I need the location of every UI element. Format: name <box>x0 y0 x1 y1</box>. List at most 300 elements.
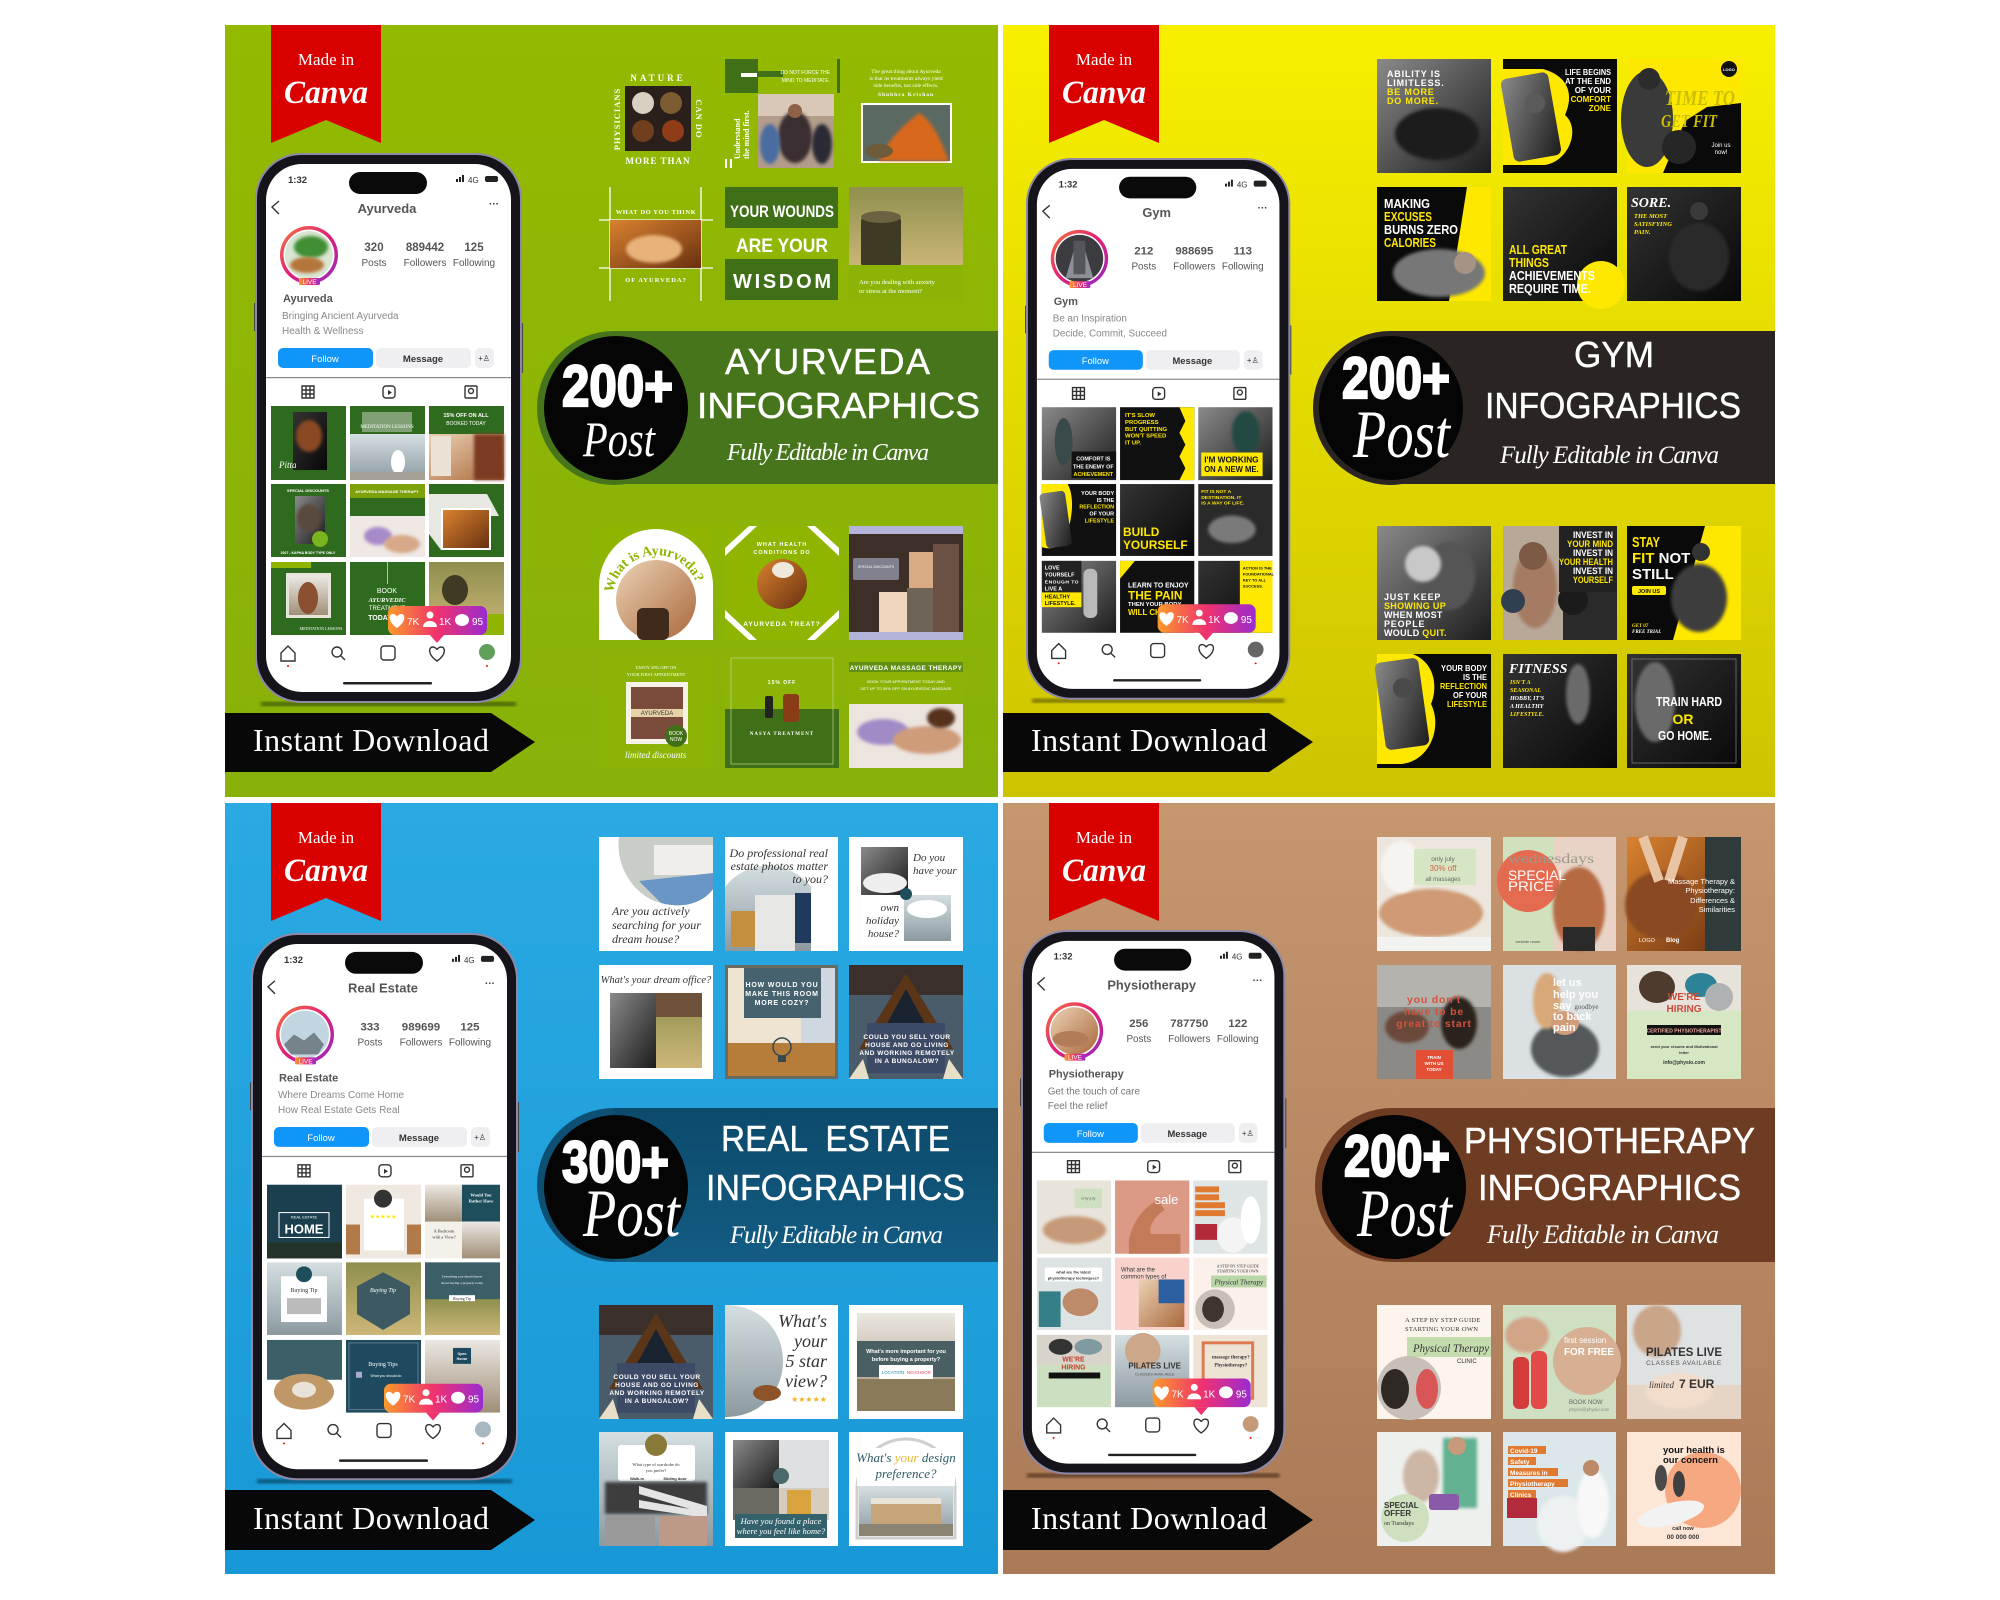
phone mockup: Real Estate profile: +♙ <box>474 1133 486 1142</box>
tile grid bottom: Physiotherapy: 00 000 000 <box>1667 1534 1700 1541</box>
thumbnail grid: sale <box>1155 1192 1178 1207</box>
tile grid top: Physiotherapy: info@physio.com <box>1663 1060 1705 1066</box>
tile grid top: Real Estate: MAKE THIS ROOM <box>745 991 819 998</box>
thumbnail grid: YOURSELF <box>1123 538 1188 552</box>
arrow: Instant Download <box>1003 1490 1313 1550</box>
banner: 200+ Post Ayurveda Infographics: Post <box>582 411 656 467</box>
tile grid top: Ayurveda: Understand <box>733 118 742 159</box>
tile grid bottom: Ayurveda: BOOK <box>669 731 684 737</box>
tile grid top: Ayurveda: The great thing about Ayurveda <box>871 69 941 75</box>
tile grid top: Ayurveda: Shubhra Krishan <box>878 92 934 98</box>
tile grid bottom: Physiotherapy: Safety <box>1510 1459 1530 1466</box>
phone mockup: Gym profile: 1:32 <box>1059 180 1077 190</box>
tile grid bottom: Physiotherapy: 7 EUR <box>1679 1377 1715 1391</box>
panel: Physiotherapy <box>1003 803 1775 1574</box>
thumbnail grid: Buying Tips <box>368 1362 398 1368</box>
ribbon: Made in Canva: Canva <box>1062 75 1146 111</box>
tile grid bottom: Ayurveda: GET UP TO 50% OFF ON AYURVEDIC MASSAGE <box>860 686 952 691</box>
tile grid top: Gym: GET FIT <box>1661 111 1718 131</box>
tile grid top: Physiotherapy: HIRING <box>1666 1004 1702 1015</box>
tile grid bottom: Physiotherapy: PILATES LIVE <box>1646 1345 1722 1359</box>
tile grid bottom: Real Estate: What's more important for you <box>866 1349 946 1355</box>
arrow: Instant Download: Instant Download <box>1031 722 1267 758</box>
thumbnail grid: SPECIAL DISCOUNTS <box>287 488 329 493</box>
thumbnail grid: Would You <box>470 1193 492 1198</box>
phone mockup: Ayurveda profile: Ayurveda <box>358 201 417 216</box>
tile grid top: Physiotherapy: Massage Therapy & <box>1668 877 1735 886</box>
tile grid bottom: Physiotherapy: call now <box>1672 1526 1695 1532</box>
banner: 200+ Post Physiotherapy Infographics: PHYSIOTHERAPY <box>1464 1120 1755 1161</box>
tile grid top: Ayurveda: OF AYURVEDA? <box>625 277 687 284</box>
phone mockup: Gym profile <box>1025 158 1291 703</box>
tile grid top: Physiotherapy: help you <box>1553 989 1598 1001</box>
tile grid bottom: Real Estate: What's <box>778 1311 827 1331</box>
phone mockup: Ayurveda profile <box>254 153 523 706</box>
tile grid top: Physiotherapy: CERTIFIED PHYSIOTHERAPIST <box>1646 1028 1722 1034</box>
thumbnail grid: ON A NEW ME. <box>1204 465 1259 474</box>
tile grid bottom: Real Estate: COULD YOU SELL YOUR <box>613 1374 701 1381</box>
phone mockup: Physiotherapy profile: Physiotherapy <box>1049 1069 1124 1081</box>
tile grid top: Physiotherapy: have to be <box>1404 1006 1464 1018</box>
tile grid bottom: Gym: GO HOME. <box>1658 728 1712 743</box>
thumbnail grid: 15% OFF ON ALL <box>443 413 489 419</box>
tile grid bottom: Physiotherapy: on Tuesdays <box>1384 1521 1415 1527</box>
tile grid top: Real Estate: house? <box>868 928 899 940</box>
phone mockup: Ayurveda profile: ··· <box>489 199 499 210</box>
phone mockup: Gym profile: Gym <box>1142 205 1171 220</box>
banner: 200+ Post Ayurveda Infographics <box>537 331 998 485</box>
engagement badge: 1K <box>1208 615 1221 626</box>
tile grid bottom: Physiotherapy: CLINIC <box>1457 1359 1477 1365</box>
tile grid top: Real Estate <box>599 837 963 1079</box>
thumbnail grid: LEARN TO ENJOY <box>1128 582 1189 589</box>
bottom navigation <box>1047 1416 1259 1456</box>
tile grid bottom: Gym: GET 07 <box>1632 624 1649 629</box>
phone mockup: Physiotherapy profile <box>1020 930 1286 1477</box>
engagement badge: 7K <box>403 1395 416 1406</box>
phone mockup: Ayurveda profile: 1:32 <box>288 175 307 186</box>
thumbnail grid: House <box>457 1357 467 1361</box>
tile grid bottom: Real Estate: your <box>792 1331 828 1351</box>
tile grid top: Gym: LIFE BEGINS <box>1565 68 1612 77</box>
tile grid bottom: Ayurveda: AYURVEDA MASSAGE THERAPY <box>850 665 963 672</box>
phone mockup: Real Estate profile: 333 <box>360 1022 380 1034</box>
ribbon: Made in Canva: Made in <box>298 50 355 69</box>
thumbnail grid: HIRING <box>1061 1365 1086 1372</box>
phone mockup: Ayurveda profile: Message <box>403 354 443 365</box>
thumbnail grid: Physiotherapy? <box>1214 1364 1248 1369</box>
banner: 300+ Post Real Estate Infographics: INFOGRAPHICS <box>706 1167 965 1208</box>
phone mockup: Gym profile: Follow <box>1082 356 1109 366</box>
bottom navigation <box>1052 642 1264 682</box>
tile grid top: Ayurveda: or stress at the moment? <box>859 288 922 295</box>
tile grid bottom: Gym: LIFESTYLE <box>1447 699 1487 709</box>
phone mockup: Real Estate profile: Following <box>449 1037 491 1048</box>
banner: 300+ Post Real Estate Infographics: REAL ESTATE <box>721 1118 950 1159</box>
phone mockup: Real Estate profile: Posts <box>358 1037 383 1048</box>
tile grid top: Real Estate: MORE COZY? <box>755 1000 809 1007</box>
engagement badge <box>1153 1378 1251 1415</box>
banner: 300+ Post Real Estate Infographics: 300+ <box>562 1130 669 1195</box>
phone mockup: Gym profile: Gym <box>1054 296 1078 308</box>
tile grid top: Physiotherapy: only july <box>1431 856 1455 863</box>
thumbnail grid: PROGRESS <box>1125 420 1159 426</box>
phone mockup: Physiotherapy profile: Following <box>1217 1034 1259 1045</box>
thumbnail grid: with a View? <box>432 1234 456 1239</box>
engagement badge: 95 <box>1236 1389 1247 1400</box>
engagement badge: 7K <box>1171 1389 1184 1400</box>
tile grid bottom: Physiotherapy: limited <box>1649 1380 1674 1390</box>
phone mockup: Gym profile: Message <box>1172 356 1212 366</box>
tile grid bottom: Real Estate: Have you found a place <box>740 1516 822 1526</box>
thumbnail grid: physiotherapy techniques? <box>1048 1275 1100 1280</box>
tile grid bottom: Real Estate: ★★★★★ <box>791 1395 827 1404</box>
banner: 300+ Post Real Estate Infographics: Fully Editable in Canva <box>729 1222 943 1249</box>
tile grid bottom: Ayurveda: ENJOY 20% OFF ON <box>636 665 677 670</box>
tile grid top: Real Estate: Are you actively <box>611 904 690 918</box>
thumbnail grid: HEALTHY <box>1045 594 1070 600</box>
engagement badge: 1K <box>435 1395 448 1406</box>
thumbnail grid: What are the <box>1121 1268 1156 1274</box>
thumbnail grid: only july <box>1081 1195 1095 1200</box>
tile grid bottom: Ayurveda: limited discounts <box>625 750 687 760</box>
thumbnail grid: Physical Therapy <box>1213 1279 1264 1286</box>
phone mockup: Real Estate profile: 989699 <box>402 1022 440 1034</box>
phone mockup: Gym profile: Decide, Commit, Succeed <box>1053 328 1167 339</box>
ribbon: Made in Canva: Canva <box>284 853 368 889</box>
tile grid bottom: Ayurveda: What is Ayurveda? <box>604 546 704 590</box>
tile grid bottom: Real Estate: AND WORKING REMOTELY <box>609 1390 705 1397</box>
engagement badge <box>1158 604 1256 641</box>
engagement badge: 95 <box>1241 615 1252 626</box>
thumbnail grid: what are the latest <box>1055 1270 1091 1275</box>
thumbnail grid: Buying Tip <box>290 1288 318 1294</box>
tile grid bottom: Gym: LIFESTYLE. <box>1509 712 1544 718</box>
tile grid bottom: Gym <box>1374 526 1741 768</box>
engagement badge <box>388 606 487 643</box>
tile grid top: Gym: SORE. <box>1631 196 1671 211</box>
tile grid bottom: Real Estate: What's your design <box>856 1450 956 1465</box>
tile grid top: Gym: COMFORT <box>1571 95 1611 104</box>
thumbnail grid: ★★★★★ <box>370 1214 396 1221</box>
tile grid top: Gym: LIMITLESS. <box>1387 78 1444 88</box>
banner: 200+ Post Physiotherapy Infographics: Post <box>1356 1175 1454 1251</box>
tile grid top: Physiotherapy: Similarities <box>1699 905 1735 914</box>
phone mockup: Ayurveda profile: Posts <box>361 258 387 269</box>
phone mockup: Ayurveda profile: Bringing Ancient Ayurveda <box>282 311 399 322</box>
tile grid top: Gym <box>1377 59 1741 309</box>
tile grid bottom: Gym: FITNESS <box>1508 662 1568 677</box>
tile grid top: Ayurveda: ARE YOUR <box>736 236 828 257</box>
phone mockup: Physiotherapy profile: Get the touch of care <box>1048 1086 1140 1097</box>
ribbon: Made in Canva <box>271 803 381 921</box>
tile grid bottom: Physiotherapy: FOR FREE <box>1564 1346 1614 1358</box>
phone mockup: Gym profile: Posts <box>1131 261 1156 272</box>
phone mockup: Real Estate profile <box>250 933 519 1483</box>
tile grid bottom: Gym: JOIN US <box>1638 589 1660 595</box>
tile grid top: Ayurveda: PHYSICIANS <box>612 88 622 150</box>
phone mockup: Ayurveda profile: Followers <box>404 258 446 269</box>
thumbnail grid: AYURVEDA MASSAGE THERAPY <box>355 489 419 494</box>
tile grid top: Gym: ABILITY IS <box>1387 69 1441 79</box>
phone mockup: Ayurveda profile: +♙ <box>478 354 490 363</box>
thumbnail grid <box>1039 407 1275 633</box>
banner: 200+ Post Gym Infographics: GYM <box>1574 334 1654 375</box>
phone mockup: Real Estate profile: 4G <box>464 956 475 965</box>
arrow: Instant Download: Instant Download <box>253 722 489 758</box>
tile grid bottom: Real Estate: you prefer? <box>646 1468 666 1473</box>
thumbnail grid: about buying a property today <box>441 1281 483 1285</box>
tile grid top: Ayurveda: NATURE <box>630 73 686 83</box>
thumbnail grid: ENOUGH TO <box>1045 580 1079 586</box>
tile grid top: Real Estate: What's your dream office? <box>601 975 712 986</box>
phone mockup: Ayurveda profile: Health & Wellness <box>282 326 364 337</box>
tile grid top: Gym: ACHIEVEMENTS <box>1509 268 1595 283</box>
tile grid top: Real Estate: HOUSE AND GO LIVING <box>865 1042 949 1049</box>
ribbon: Made in Canva: Canva <box>284 75 368 111</box>
banner: 200+ Post Gym Infographics: 200+ <box>1342 346 1450 411</box>
tile grid top: Ayurveda: YOUR WOUNDS <box>730 202 834 221</box>
tile grid top: Physiotherapy: website name <box>1516 939 1541 944</box>
phone mockup: Gym profile: Following <box>1222 261 1264 272</box>
phone mockup: Real Estate profile: Where Dreams Come Home <box>278 1090 405 1101</box>
thumbnail grid: KEY TO ALL <box>1243 578 1267 583</box>
tile grid top: Gym: BURNS ZERO <box>1384 222 1458 237</box>
thumbnail grid: Open <box>458 1352 466 1356</box>
tile grid top: Ayurveda: WISDOM <box>733 271 831 293</box>
ribbon: Made in Canva: Canva <box>1062 853 1146 889</box>
tile grid top: Physiotherapy: you don't <box>1407 994 1461 1006</box>
tile grid bottom: Gym: SHOWING UP <box>1384 601 1446 611</box>
tile grid bottom: Ayurveda: BOOK YOUR APPOINTMENT TODAY AND <box>867 679 945 684</box>
tile grid bottom: Gym: WHEN MOST <box>1384 610 1443 620</box>
tile grid top: Ayurveda <box>599 59 963 301</box>
tile grid top: Physiotherapy <box>1377 837 1741 1079</box>
tile grid top: Gym: DO MORE. <box>1387 96 1439 106</box>
phone mockup: Real Estate profile: 1:32 <box>284 955 303 966</box>
tile grid top: Physiotherapy: say goodbye <box>1553 1000 1599 1012</box>
tile grid top: Ayurveda: is that its treatments always yield <box>869 76 943 82</box>
phone mockup: Ayurveda profile: Following <box>453 258 495 269</box>
thumbnail grid: CLASSES AVAILABLE <box>1135 1372 1175 1377</box>
tile grid top: Physiotherapy: PRICE <box>1508 878 1554 894</box>
phone mockup: Physiotherapy profile: Follow <box>1077 1128 1104 1139</box>
phone mockup: Physiotherapy profile: 122 <box>1228 1018 1247 1030</box>
tile grid top: Physiotherapy: all massages <box>1425 877 1461 883</box>
phone mockup: Gym profile: LIVE <box>1073 282 1087 289</box>
phone mockup: Real Estate profile: Message <box>399 1133 439 1144</box>
banner: 200+ Post Physiotherapy Infographics: Fully Editable in Canva <box>1486 1220 1719 1249</box>
thumbnail grid: LIFESTYLE. <box>1045 601 1076 607</box>
tile grid top: Gym: ALL GREAT <box>1509 242 1567 257</box>
arrow: Instant Download: Instant Download <box>1031 1500 1267 1536</box>
tile grid bottom: Real Estate: where you feel like home? <box>737 1526 826 1536</box>
thumbnail grid: Buying Tip <box>453 1296 471 1301</box>
phone mockup: Physiotherapy profile: LIVE <box>1068 1055 1082 1062</box>
thumbnail grid: LIFESTYLE <box>1085 518 1114 524</box>
tile grid top: Physiotherapy: Blog <box>1666 938 1680 944</box>
banner: 300+ Post Real Estate Infographics: Post <box>582 1175 682 1251</box>
tile grid bottom: Physiotherapy: CLASSES AVAILABLE <box>1646 1360 1722 1367</box>
thumbnail grid: PILATES LIVE <box>1128 1362 1181 1371</box>
tile grid bottom: Gym: FIT NOT <box>1632 550 1690 567</box>
thumbnail grid: BUT QUITTING <box>1125 427 1168 433</box>
tile grid bottom: Gym: SEASONAL <box>1510 688 1541 694</box>
tile grid top: Gym: TIME TO <box>1665 86 1735 110</box>
banner: 200+ Post Physiotherapy Infographics: 200+ <box>1344 1124 1450 1189</box>
tile grid top: Gym: PAIN. <box>1634 229 1651 236</box>
panel: Ayurveda <box>225 25 998 797</box>
phone mockup: Physiotherapy profile: ··· <box>1253 975 1263 986</box>
phone mockup: Real Estate profile: 125 <box>460 1022 480 1034</box>
thumbnail grid: WE'RE <box>1062 1357 1085 1364</box>
tile grid bottom: Physiotherapy: Clinics <box>1510 1492 1532 1499</box>
banner: 200+ Post Gym Infographics: Fully Editable in Canva <box>1499 442 1719 469</box>
tile grid bottom: Gym: ISN'T A <box>1509 680 1531 686</box>
thumbnail grid: FOUNDATIONAL <box>1243 572 1275 577</box>
tile grid top: Gym: ZONE <box>1589 104 1612 113</box>
tile grid top: Ayurveda: CAN DO <box>694 99 704 139</box>
tile grid top: Physiotherapy: Physiotherapy: <box>1685 886 1735 895</box>
tile grid top: Gym: SATISFYING <box>1634 221 1672 228</box>
tile grid bottom: Real Estate: What type of wardrobe do <box>632 1462 680 1467</box>
tile grid bottom: Real Estate: before buying a property? <box>872 1357 941 1363</box>
tile grid top: Ayurveda: the mind first. <box>742 110 751 159</box>
thumbnail grid: Pitta <box>278 460 297 470</box>
thumbnail grid: BOOK <box>377 588 397 595</box>
tile grid bottom: Real Estate: 5 star <box>785 1351 828 1371</box>
phone mockup: Gym profile: Be an Inspiration <box>1053 314 1127 325</box>
thumbnail grid: REFLECTION <box>1079 505 1114 511</box>
tile grid bottom: Gym: REFLECTION <box>1440 681 1487 691</box>
thumbnail grid: What you should do <box>371 1374 401 1378</box>
thumbnail grid: AYURVEDIC <box>367 597 406 604</box>
tile grid bottom: Physiotherapy: Measures in <box>1510 1470 1548 1477</box>
tile grid top: Ayurveda: side benefits, not side effects. <box>874 82 939 89</box>
tile grid top: Physiotherapy: LOGO <box>1639 938 1656 944</box>
thumbnail grid: FIT IS NOT A <box>1201 489 1232 495</box>
tile grid top: Real Estate: HOW WOULD YOU <box>746 982 818 989</box>
thumbnail grid <box>271 406 504 635</box>
tile grid bottom: Ayurveda: SPECIAL DISCOUNTS <box>858 565 895 569</box>
tile grid top: Real Estate: Do you <box>912 852 946 864</box>
banner: 200+ Post Ayurveda Infographics: INFOGRAPHICS <box>697 385 980 426</box>
tile grid top: Real Estate: searching for your <box>612 918 701 932</box>
thumbnail grid: A STEP BY STEP GUIDE <box>1217 1264 1260 1269</box>
thumbnail grid: ACTION IS THE <box>1243 566 1272 571</box>
thumbnail grid: THE ENEMY OF <box>1073 464 1114 470</box>
thumbnail grid: LOVE <box>1045 566 1060 572</box>
engagement badge: 1K <box>439 617 452 628</box>
engagement badge <box>384 1384 483 1421</box>
tile grid top: Gym: CALORIES <box>1384 235 1436 250</box>
tile grid top: Ayurveda: DO NOT FORCE THE <box>780 70 831 76</box>
ribbon: Made in Canva <box>271 25 381 143</box>
tile grid top: Gym: REQUIRE TIME. <box>1509 281 1591 296</box>
thumbnail grid: Rather Have <box>469 1199 493 1204</box>
tile grid bottom: Gym: INVEST IN <box>1573 530 1613 540</box>
tile grid bottom: Physiotherapy: OFFER <box>1384 1509 1411 1518</box>
phone mockup: Ayurveda profile: 889442 <box>406 242 444 254</box>
thumbnail grid: A Bedroom <box>434 1229 455 1233</box>
tile grid top: Gym: THINGS <box>1509 255 1549 270</box>
phone mockup: Gym profile: +♙ <box>1247 356 1259 365</box>
tile grid bottom: Ayurveda: NASYA TREATMENT <box>750 732 814 737</box>
thumbnail grid: WON'T SPEED <box>1125 434 1167 440</box>
tile grid top: Gym: AT THE END <box>1565 77 1611 86</box>
ribbon: Made in Canva <box>1049 803 1159 921</box>
tile grid bottom: Gym: STILL <box>1632 566 1674 583</box>
tile grid top: Physiotherapy: send your resume and Motivational <box>1650 1044 1718 1049</box>
thumbnail grid: WILL CHANGE <box>1128 608 1184 617</box>
tile grid top: Physiotherapy: Differences & <box>1690 896 1735 905</box>
tile grid top: Physiotherapy: WITH US <box>1424 1061 1444 1066</box>
tile grid bottom: Real Estate: preference? <box>874 1466 937 1481</box>
ribbon: Made in Canva <box>1049 25 1159 143</box>
tile grid top: Gym: EXCUSES <box>1384 209 1432 224</box>
tile grid bottom: Gym: FREE TRIAL <box>1632 630 1661 635</box>
tile grid top: Gym: Join us <box>1711 143 1731 149</box>
tile grid bottom: Real Estate: HOUSE AND GO LIVING <box>615 1382 699 1389</box>
thumbnail grid: ACHIEVEMENT <box>1074 472 1114 478</box>
thumbnail grid: massage therapy? <box>1212 1356 1250 1361</box>
tile grid bottom: Gym: WOULD QUIT. <box>1384 628 1447 638</box>
phone mockup: Real Estate profile: How Real Estate Gets Real <box>278 1105 400 1116</box>
phone mockup: Physiotherapy profile: Feel the relief <box>1048 1101 1108 1112</box>
tile grid bottom: Ayurveda: AYURVEDA <box>641 711 673 717</box>
tile grid top: Ayurveda: MIND TO MEDITATE. <box>782 78 830 84</box>
phone mockup: Real Estate profile: ··· <box>485 979 495 990</box>
tile grid bottom: Gym: PEOPLE <box>1384 619 1425 629</box>
arrow: Instant Download <box>1003 713 1313 772</box>
ribbon: Made in Canva: Made in <box>298 828 355 847</box>
tile grid bottom: Gym: YOUR BODY <box>1441 663 1487 673</box>
tile grid bottom: Physiotherapy: first session <box>1564 1336 1606 1345</box>
phone mockup: Ayurveda profile: Follow <box>311 354 339 365</box>
tile grid bottom: Gym: IS THE <box>1463 672 1487 682</box>
phone mockup: Physiotherapy profile: Physiotherapy <box>1107 977 1197 992</box>
tile grid top: Gym: MAKING <box>1384 196 1430 211</box>
phone mockup: Gym profile: Followers <box>1173 261 1216 272</box>
thumbnail grid: I'M WORKING <box>1204 455 1259 464</box>
tile grid top: Physiotherapy: TRAIN <box>1427 1055 1441 1060</box>
tile grid bottom: Real Estate: view? <box>785 1371 827 1391</box>
banner: 200+ Post Physiotherapy Infographics <box>1315 1108 1775 1262</box>
thumbnail grid: MEDITATION LESSONS <box>300 626 342 631</box>
phone mockup: Physiotherapy profile: Posts <box>1126 1034 1151 1045</box>
thumbnail grid: COMFORT IS <box>1076 456 1111 462</box>
tile grid bottom: Gym: HOBBY, IT'S <box>1509 696 1545 702</box>
thumbnail grid: STARTING YOUR OWN <box>1217 1269 1259 1274</box>
tile grid bottom: Gym: INVEST IN <box>1573 566 1613 576</box>
tile grid bottom: Physiotherapy: Covid-19 <box>1510 1448 1538 1455</box>
thumbnail grid: 2027 - KAPHA BODY TYPE ONLY <box>281 551 336 555</box>
phone mockup: Physiotherapy profile: Message <box>1167 1128 1207 1139</box>
tile grid top: Gym: OF YOUR <box>1575 86 1611 95</box>
banner: 200+ Post Ayurveda Infographics: AYURVEDA <box>725 341 930 382</box>
thumbnail grid: TODAY <box>368 615 392 622</box>
arrow: Instant Download <box>225 1490 535 1550</box>
thumbnail grid: THEN YOUR BODY <box>1128 602 1182 608</box>
tile grid bottom: Physiotherapy: BOOK NOW <box>1569 1400 1603 1406</box>
thumbnail grid: Everything you should know <box>442 1274 483 1278</box>
tile grid top: Real Estate: to you? <box>792 872 828 886</box>
tile grid bottom: Real Estate: Sliding door <box>663 1476 687 1481</box>
tile grid bottom: Gym: A HEALTHY <box>1509 704 1545 710</box>
tile grid bottom: Physiotherapy: your health is <box>1663 1445 1725 1456</box>
tile grid bottom: Ayurveda: AYURVEDA TREAT? <box>743 621 821 628</box>
thumbnail grid: IS THE <box>1097 498 1114 504</box>
